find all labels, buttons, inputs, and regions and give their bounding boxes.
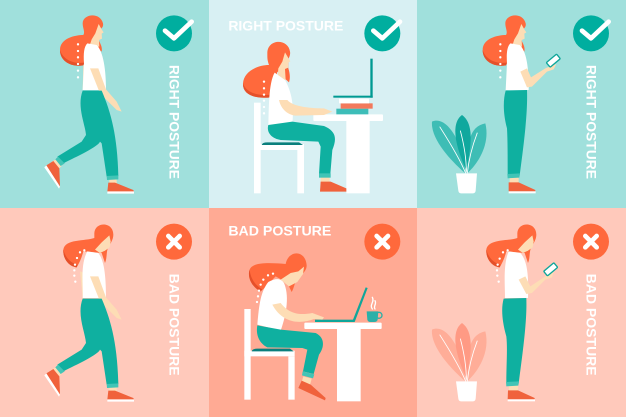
laptop [315,287,368,322]
plant [432,323,487,401]
desk [304,323,382,401]
label: right posture: RIGHT POSTURE [584,65,600,179]
icon: check mark [573,15,609,51]
panel: bad posture phone [417,208,626,417]
spine dots [77,43,79,78]
spine dots [496,249,509,283]
label: bad posture: BAD POSTURE [584,274,600,376]
panel: right posture walking [0,0,209,208]
coffee cup [367,297,382,322]
heading: right posture: RIGHT POSTURE [228,18,343,34]
icon: cross mark [573,224,609,260]
chair [254,103,304,193]
woman standing slouched with phone [486,224,554,401]
desk [313,114,383,193]
panel: right posture phone [417,0,626,208]
laptop [333,59,373,98]
icon: check mark [156,15,192,51]
woman walking slouched [44,224,134,402]
label: right posture: RIGHT POSTURE [167,65,183,179]
books [336,99,373,114]
panel: bad posture sitting [209,208,418,417]
icon: check mark [364,15,400,51]
spine dots [73,249,85,283]
panel: bad posture walking [0,208,209,417]
spine dots [263,80,265,114]
label: bad posture: BAD POSTURE [167,274,183,376]
woman standing upright with phone [483,15,556,193]
woman sitting upright [243,42,346,192]
icon: cross mark [156,224,192,260]
heading: bad posture: BAD POSTURE [228,222,331,238]
woman sitting slouched [249,253,326,400]
spine dots [499,43,501,78]
plant [432,115,487,193]
icon: cross mark [364,224,400,260]
phone [544,263,558,276]
chair [244,309,295,400]
spine dots [256,272,274,303]
woman walking upright [44,15,134,194]
phone [546,54,560,67]
panel: right posture sitting [209,0,418,208]
